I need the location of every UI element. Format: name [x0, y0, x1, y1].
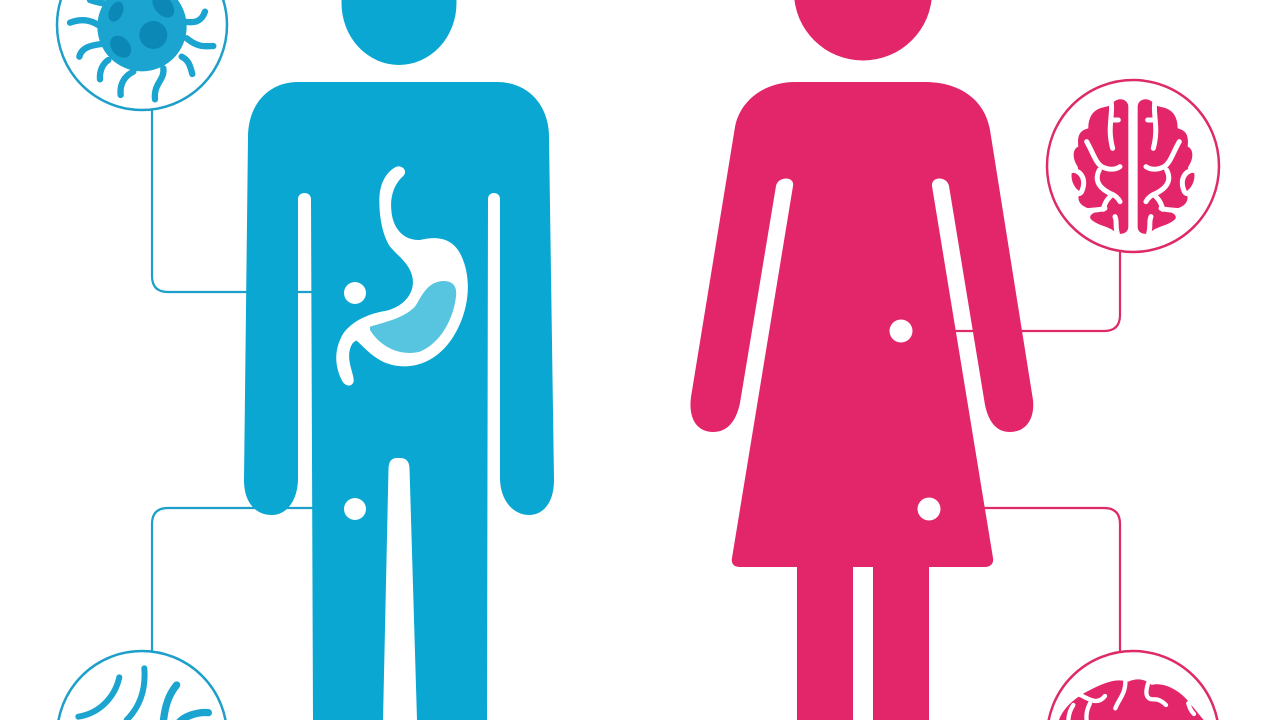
connector: lower brain to female hip [980, 508, 1120, 652]
connector: brain to female torso [950, 250, 1120, 331]
icon: brain side view in circle [1047, 651, 1219, 720]
male body [244, 82, 554, 720]
male figure [244, 0, 554, 720]
marker dot: upper female [890, 320, 912, 342]
female head [794, 0, 932, 60]
connector: bacteria to male hip [152, 508, 314, 652]
right hemisphere [1138, 99, 1194, 234]
marker dot: lower male [344, 498, 366, 520]
icon: brain top view in circle [1047, 80, 1219, 252]
female body [690, 82, 1033, 720]
female figure [690, 0, 1033, 720]
marker dot: lower female [918, 498, 940, 520]
icon: bacteria in circle [57, 651, 227, 720]
marker dot: stomach [344, 282, 366, 304]
left hemisphere [1072, 99, 1128, 234]
connector: virus to male torso [152, 108, 314, 292]
icon: virus in circle [57, 0, 227, 110]
male head [342, 0, 456, 65]
icon: stomach [336, 166, 468, 386]
